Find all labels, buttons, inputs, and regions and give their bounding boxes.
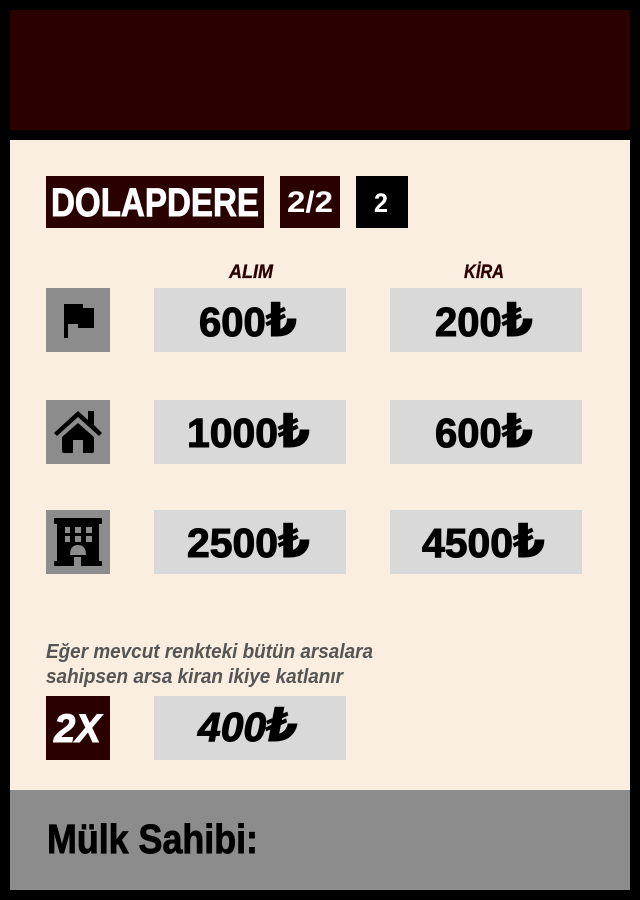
badge: number bbox=[356, 176, 408, 228]
price: house purchase bbox=[154, 400, 346, 464]
title: property name: DOLAPDERE bbox=[51, 181, 259, 225]
badge: set count: 2/2 bbox=[287, 186, 333, 219]
panel: card body bbox=[10, 140, 630, 790]
price: land rent: 200₺ bbox=[435, 294, 533, 346]
price: hotel rent: 4500₺ bbox=[422, 515, 545, 567]
note: double rent rule bbox=[46, 641, 373, 688]
badge: 2X multiplier bbox=[46, 696, 110, 760]
price: house rent bbox=[390, 400, 582, 464]
price: house rent: 600₺ bbox=[435, 405, 533, 457]
column heading: rent: KİRA bbox=[464, 262, 504, 283]
note: double rent rule: Eğer mevcut renkteki bütün arsalara bbox=[46, 641, 373, 663]
badge: set count bbox=[280, 176, 340, 228]
top colour band bbox=[10, 10, 630, 130]
price: land purchase: 600₺ bbox=[199, 294, 297, 346]
icon: flag bbox=[46, 288, 110, 352]
owner label: Mülk Sahibi: bbox=[47, 816, 258, 862]
column heading: purchase: ALIM bbox=[228, 262, 274, 283]
price: hotel purchase: 2500₺ bbox=[187, 515, 310, 567]
price: house purchase: 1000₺ bbox=[187, 405, 310, 457]
icon: house bbox=[46, 400, 110, 464]
price: doubled rent: 400₺ bbox=[197, 699, 298, 751]
price: land purchase bbox=[154, 288, 346, 352]
price: hotel purchase bbox=[154, 510, 346, 574]
price: hotel rent bbox=[390, 510, 582, 574]
icon: hotel building bbox=[46, 510, 110, 574]
price: land rent bbox=[390, 288, 582, 352]
price: doubled rent bbox=[154, 696, 346, 760]
note: double rent rule: sahipsen arsa kiran ikiye katlanır bbox=[46, 666, 344, 688]
panel: owner footer bbox=[10, 790, 630, 890]
badge: number: 2 bbox=[374, 188, 388, 218]
badge: 2X multiplier: 2X bbox=[53, 707, 103, 751]
